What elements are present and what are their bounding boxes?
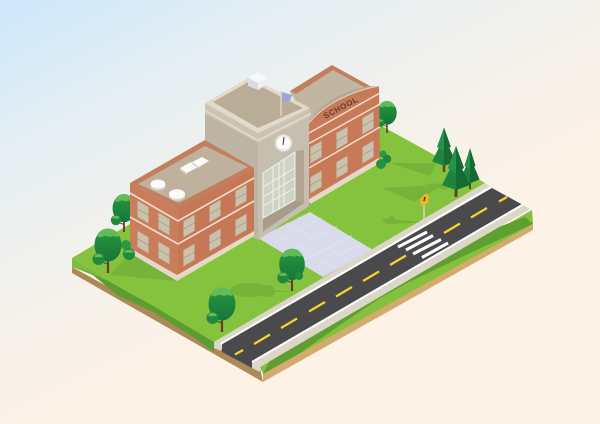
door frame: [263, 150, 304, 232]
wing facade: [309, 86, 380, 205]
grass lawn: [72, 125, 485, 342]
bush by plaza tree: [295, 272, 303, 280]
school sign: SCHOOL: [322, 95, 360, 121]
plaza: [258, 212, 373, 277]
tower roof: [213, 81, 303, 128]
round tree near plaza: [277, 249, 305, 291]
clock: [275, 135, 292, 151]
left wing left wall: [130, 183, 178, 279]
tower cornice: [205, 103, 311, 143]
left wing bands: [130, 178, 254, 244]
shadows on the lawn: [110, 163, 458, 297]
left wing of school: [130, 140, 254, 281]
flag: [281, 91, 292, 116]
tower front face: [258, 116, 309, 240]
bushes by right wing: [376, 150, 391, 169]
glass entrance: [263, 152, 295, 218]
dark grass wave front: [263, 217, 533, 374]
central tower: [205, 72, 311, 240]
tree behind right wing: [376, 101, 397, 133]
round roof vents: [150, 180, 185, 201]
round tree on front lawn centre: [206, 288, 236, 332]
bushes beside left tree: [121, 240, 135, 260]
road: [220, 187, 523, 368]
soil right face: [263, 224, 533, 382]
pine trees: [432, 128, 480, 197]
far sidewalk: [252, 205, 530, 372]
school crossing sign: [420, 193, 429, 221]
ground base: [72, 125, 533, 382]
left wing windows: [138, 185, 246, 266]
left wing roof: [130, 140, 254, 209]
base plinth: [130, 231, 254, 281]
grass left side: [72, 258, 214, 352]
crosswalk: [398, 232, 448, 258]
wing windows: [310, 112, 374, 193]
soil left face: [72, 267, 263, 382]
roof AC unit: [248, 72, 267, 90]
sidewalk near lawn: [214, 183, 492, 351]
tree behind left wing: [111, 194, 135, 232]
wing roof: [290, 66, 379, 125]
tower left face: [205, 113, 258, 240]
square roof vents: [180, 157, 209, 175]
grass strip front: [260, 210, 533, 374]
wing bands: [309, 93, 380, 168]
round tree on front lawn left: [92, 228, 122, 273]
facade curved edge: [309, 86, 379, 123]
right wing of school: [290, 65, 380, 205]
yellow centre dashes: [235, 197, 507, 354]
dark grass wave left: [80, 268, 214, 352]
left wing front wall: [178, 168, 254, 279]
roof shadow: [310, 86, 372, 121]
road edge lines: [220, 187, 523, 362]
